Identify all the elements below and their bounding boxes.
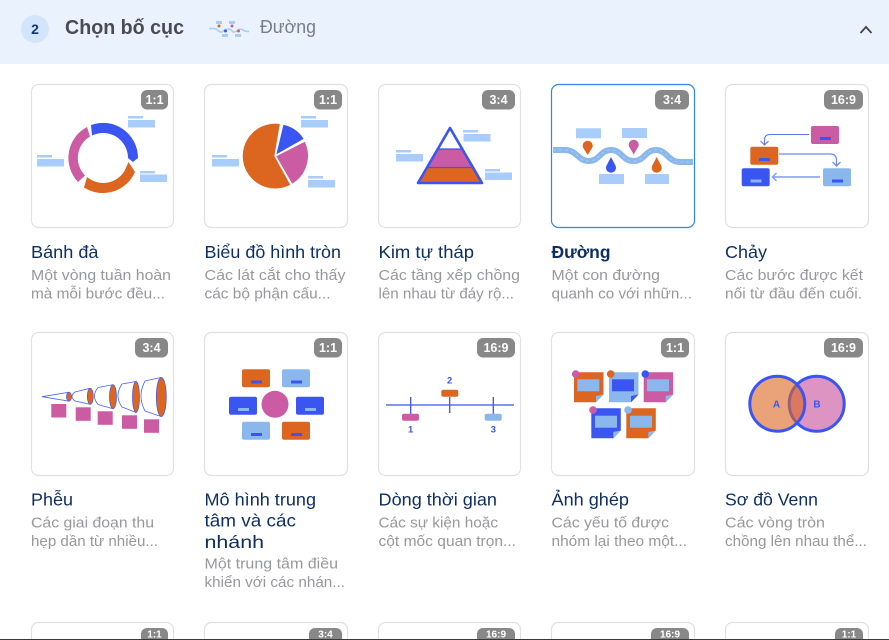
timeline diagram: 2 bbox=[447, 376, 452, 386]
heading: Chọn bố cục bbox=[65, 17, 184, 39]
card title: Sơ đồ Venn bbox=[725, 490, 818, 510]
ratio badge bbox=[824, 338, 863, 358]
ratio badge: 3:4 bbox=[489, 93, 508, 107]
icon: collapse chevron bbox=[860, 27, 872, 33]
card description: Một trung tâm điều bbox=[204, 556, 338, 572]
card description bbox=[31, 267, 171, 302]
card: Đường (selected) bbox=[552, 84, 694, 302]
ratio badge: 1:1 bbox=[319, 93, 337, 107]
timeline diagram: 1 bbox=[408, 424, 414, 436]
pyramid diagram bbox=[396, 128, 512, 183]
card description bbox=[725, 267, 864, 302]
card: Sơ đồ Venn bbox=[725, 332, 868, 550]
card title: Biểu đồ hình tròn bbox=[204, 242, 341, 262]
card description: Các vòng tròn bbox=[725, 514, 825, 532]
card title: Phễu bbox=[31, 488, 73, 510]
donut cycle diagram bbox=[37, 116, 167, 193]
card description bbox=[378, 267, 520, 302]
flow diagram bbox=[742, 126, 851, 186]
card: Chảy bbox=[725, 84, 868, 302]
card title: Mô hình trung bbox=[204, 490, 316, 510]
card description bbox=[204, 267, 346, 302]
card description: mà mỗi bước đều... bbox=[31, 286, 165, 302]
ratio badge bbox=[824, 90, 863, 110]
card title: Chảy bbox=[725, 242, 767, 262]
venn diagram bbox=[750, 376, 844, 431]
card title: Dòng thời gian bbox=[378, 490, 497, 510]
ratio badge: 3:4 bbox=[142, 341, 161, 355]
card title: tâm và các bbox=[204, 510, 296, 530]
ratio badge: 1:1 bbox=[666, 341, 684, 355]
card description: Các tầng xếp chồng bbox=[378, 267, 520, 284]
card: Bánh đà bbox=[31, 84, 174, 302]
card title: Kim tự tháp bbox=[378, 242, 474, 262]
card description: chồng lên nhau thể... bbox=[725, 533, 867, 550]
card description: khiển với các nhán... bbox=[204, 574, 345, 591]
venn diagram: B bbox=[813, 400, 821, 410]
clipped third row of cards bbox=[32, 622, 868, 640]
card description bbox=[31, 514, 158, 550]
card description: lên nhau từ đáy rộ... bbox=[378, 286, 514, 302]
funnel diagram bbox=[42, 378, 166, 433]
step number badge bbox=[21, 15, 49, 43]
timeline diagram: 3 bbox=[491, 424, 496, 436]
step number badge: 2 bbox=[31, 21, 39, 37]
header bar bbox=[0, 0, 889, 64]
ratio badge bbox=[141, 90, 168, 110]
ratio badge bbox=[477, 338, 515, 358]
card: Biểu đồ hình tròn bbox=[204, 84, 348, 302]
card description: Các sự kiện hoặc bbox=[378, 514, 499, 532]
card title: Ảnh ghép bbox=[552, 488, 629, 510]
card: Kim tự tháp bbox=[378, 84, 520, 302]
card description: Các giai đoạn thu bbox=[31, 514, 154, 532]
card description: cột mốc quan trọn... bbox=[378, 533, 516, 550]
card description bbox=[552, 514, 687, 550]
ratio badge: 16:9 bbox=[483, 341, 509, 355]
card description: Một con đường bbox=[552, 267, 660, 284]
card description: nối từ đầu đến cuối. bbox=[725, 286, 862, 302]
card: Dòng thời gian bbox=[378, 332, 520, 550]
ratio badge bbox=[314, 338, 342, 358]
selected layout name: Đường bbox=[260, 17, 316, 37]
card description bbox=[725, 514, 867, 550]
ratio badge bbox=[314, 90, 342, 110]
card description: Một vòng tuần hoàn bbox=[31, 267, 171, 284]
card description: nhóm lại theo một... bbox=[552, 533, 687, 550]
ratio badge bbox=[661, 338, 689, 358]
sticky note collage bbox=[572, 370, 673, 438]
card description: Các yếu tố được bbox=[552, 514, 670, 532]
card: Mô hình trung tâm và các nhánh bbox=[204, 332, 348, 591]
card title: Đường bbox=[552, 242, 610, 262]
hub and spoke diagram bbox=[229, 369, 324, 440]
winding road diagram bbox=[553, 128, 693, 184]
card description: các bộ phận cấu... bbox=[204, 286, 330, 302]
card description bbox=[552, 267, 692, 302]
card description: hẹp dần từ nhiều... bbox=[31, 533, 158, 550]
card description: quanh co với nhữn... bbox=[552, 286, 692, 302]
venn diagram: A bbox=[773, 400, 780, 410]
card description: Các lát cắt cho thấy bbox=[204, 267, 346, 284]
ratio badge: 3:4 bbox=[663, 93, 681, 107]
card title: Bánh đà bbox=[31, 242, 99, 262]
ratio badge bbox=[482, 90, 515, 110]
timeline diagram bbox=[386, 376, 514, 436]
icon: mini road layout bbox=[209, 21, 249, 37]
ratio badge: 16:9 bbox=[831, 93, 856, 107]
card: Ảnh ghép bbox=[552, 332, 694, 550]
pie chart bbox=[212, 116, 335, 189]
ratio badge bbox=[135, 338, 168, 358]
card title: nhánh bbox=[204, 532, 264, 552]
card: Phễu bbox=[31, 332, 174, 550]
card description bbox=[378, 514, 516, 550]
ratio badge bbox=[655, 90, 689, 110]
ratio badge: 1:1 bbox=[145, 93, 164, 107]
card description: Các bước được kết bbox=[725, 267, 864, 284]
card title bbox=[204, 490, 316, 552]
card description bbox=[204, 556, 345, 591]
ratio badge: 16:9 bbox=[831, 341, 856, 355]
ratio badge: 1:1 bbox=[319, 341, 337, 355]
